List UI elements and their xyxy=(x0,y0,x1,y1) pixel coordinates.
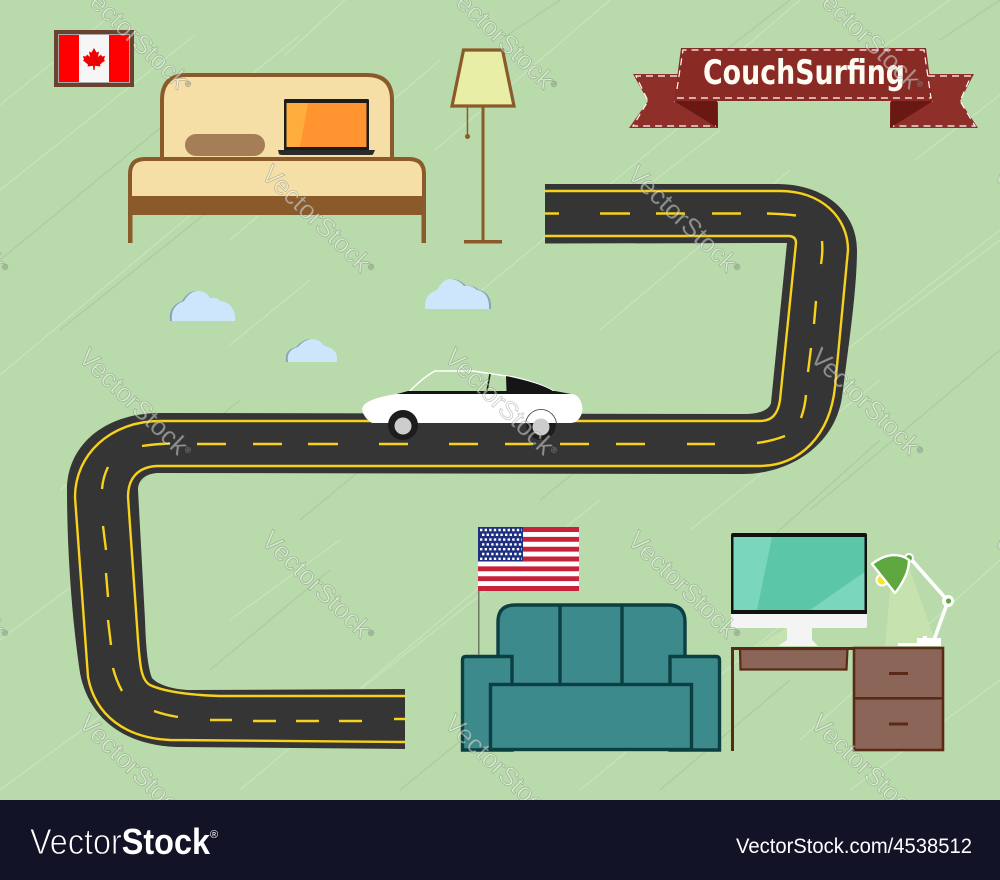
watermarks: ® xyxy=(183,811,193,821)
mattress xyxy=(130,159,424,198)
desk cabinet xyxy=(854,648,943,750)
watermarks: VectorStock xyxy=(439,708,560,827)
watermarks: VectorStock xyxy=(439,342,560,461)
ribbon stitching xyxy=(633,50,975,126)
desk centre drawer xyxy=(740,649,848,670)
sofa cushion dividers xyxy=(560,605,622,685)
car roof xyxy=(408,371,556,394)
watermarks: ® xyxy=(183,79,193,89)
ribbon folds xyxy=(674,101,933,128)
monitor body xyxy=(731,533,867,614)
watermarks: VectorStock xyxy=(622,525,743,644)
watermarks: ® xyxy=(732,262,742,272)
watermarks: VectorStock xyxy=(805,708,926,827)
lamp joint top xyxy=(905,554,913,562)
road edge line inner loop xyxy=(75,236,796,742)
rear wheel xyxy=(526,410,556,440)
USA flag xyxy=(478,527,579,655)
footer logo: VectorStock xyxy=(30,821,211,862)
watermarks: VectorStock xyxy=(256,159,377,278)
ribbon banner xyxy=(629,48,978,128)
lamp shade xyxy=(872,555,909,593)
monitor chin xyxy=(731,614,867,628)
monitor screen xyxy=(734,537,864,610)
sofa right arm xyxy=(670,656,720,750)
desk xyxy=(731,647,944,751)
lamp base xyxy=(898,636,941,646)
watermarks: ® xyxy=(549,79,559,89)
watermarks: VectorStock xyxy=(622,159,743,278)
watermarks: ® xyxy=(915,79,925,89)
road centre dashes xyxy=(102,214,822,721)
laptop xyxy=(278,99,375,155)
lamp arm xyxy=(910,558,948,640)
car xyxy=(362,371,582,440)
ribbon right tail xyxy=(890,74,978,128)
footer image id: VectorStock.com/4538512 xyxy=(736,835,972,858)
headboard xyxy=(162,75,392,157)
floor lamp xyxy=(452,50,514,244)
watermarks: ® xyxy=(549,811,559,821)
car window xyxy=(506,376,553,391)
front wheel xyxy=(388,410,418,440)
clouds xyxy=(170,279,491,362)
watermarks: VectorStock xyxy=(73,708,194,827)
watermarks: ® xyxy=(732,628,742,638)
watermarks: ® xyxy=(915,445,925,455)
desk lamp xyxy=(872,554,954,646)
ribbon main panel xyxy=(674,48,933,101)
watermarks: ® xyxy=(183,445,193,455)
bed xyxy=(128,75,426,243)
cloud small xyxy=(286,339,337,362)
lamp bulb xyxy=(876,574,888,586)
desk top xyxy=(731,647,944,650)
car pillar xyxy=(487,374,490,391)
watermarks: ® xyxy=(549,445,559,455)
desk light glow xyxy=(758,570,937,646)
rear wheel arch xyxy=(526,410,556,440)
watermarks: ® xyxy=(915,811,925,821)
car body xyxy=(362,394,582,423)
sofa back xyxy=(498,605,685,685)
desk left leg xyxy=(731,647,734,751)
desktop computer xyxy=(731,533,867,646)
ribbon title: CouchSurfing xyxy=(703,53,905,93)
footer bar xyxy=(0,800,1000,880)
sofa left arm xyxy=(462,656,512,750)
rear wheel hub xyxy=(532,418,550,436)
pillow xyxy=(185,134,265,156)
watermarks: ® xyxy=(366,262,376,272)
registered mark: ® xyxy=(210,829,218,841)
road edge line outer loop xyxy=(128,191,848,696)
lamp joint xyxy=(942,595,954,607)
drawer handles xyxy=(889,674,908,724)
monitor stand xyxy=(778,628,818,646)
sofa xyxy=(462,605,720,750)
watermarks: VectorStock xyxy=(805,342,926,461)
cloud right xyxy=(425,279,491,309)
cloud left xyxy=(170,291,235,321)
watermarks: ® xyxy=(366,628,376,638)
sofa seat xyxy=(490,684,692,750)
road xyxy=(67,184,857,749)
ribbon left tail xyxy=(629,74,718,128)
watermarks: VectorStock xyxy=(73,342,194,461)
bed frame xyxy=(128,198,426,243)
Canada flag in frame xyxy=(54,30,134,87)
watermarks: VectorStock xyxy=(256,525,377,644)
car sill xyxy=(397,391,571,394)
road surface xyxy=(67,184,857,749)
